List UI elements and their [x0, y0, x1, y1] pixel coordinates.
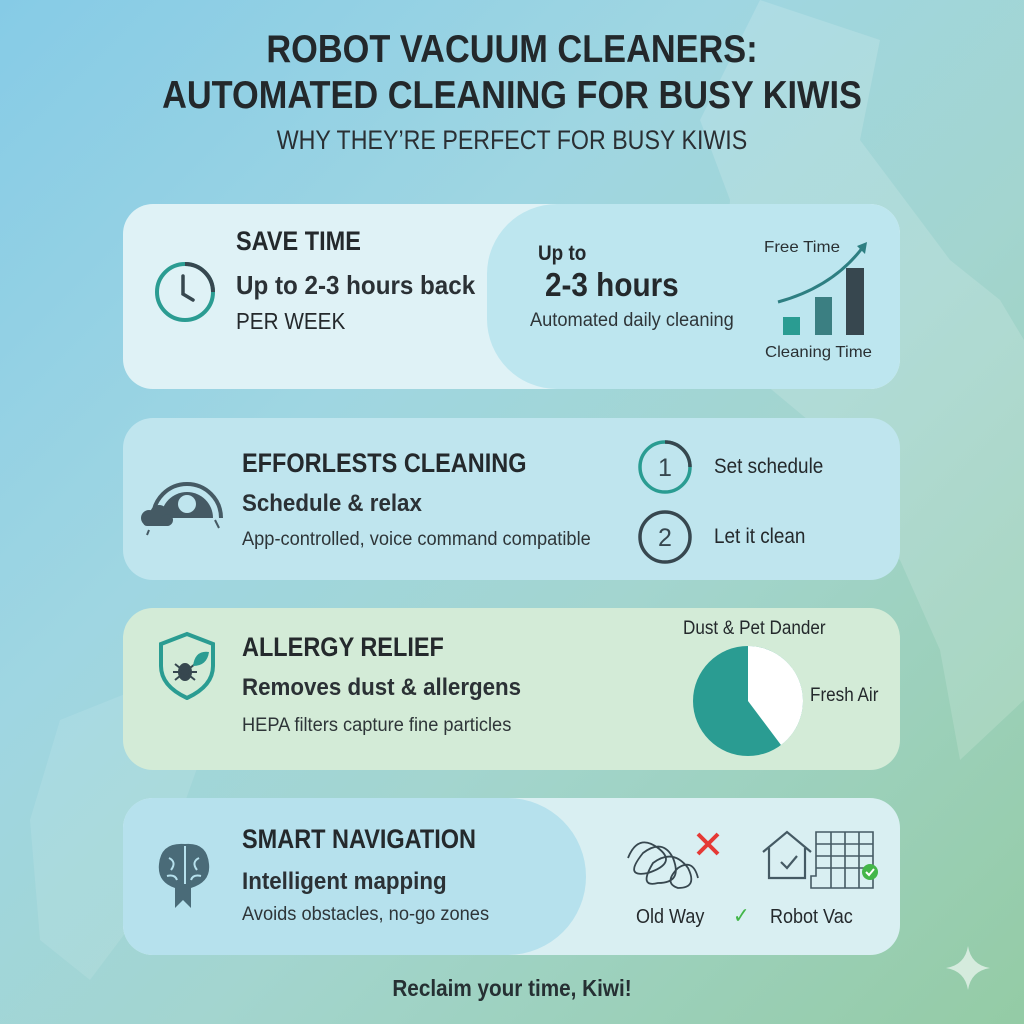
main text: Up to 2-3 hours back: [236, 270, 475, 300]
bar chart: Cleaning Time: [765, 344, 872, 361]
sub text: App-controlled, voice command compatible: [242, 529, 591, 550]
heading: EFFORLESTS CLEANING: [242, 448, 527, 478]
panel: save time: 2-3 hours: [545, 266, 679, 303]
icon: brain: [158, 844, 210, 908]
stat: Up to: [538, 242, 586, 265]
footer: Reclaim your time, Kiwi!: [392, 975, 632, 1001]
legend: Old Way: [636, 906, 704, 928]
subtitle: WHY THEY’RE PERFECT FOR BUSY KIWIS: [277, 125, 747, 155]
panel: smart navigation: Robot Vac: [770, 906, 853, 928]
bar chart: [764, 239, 872, 361]
pie chart: [693, 646, 803, 756]
panel: smart navigation: [123, 798, 900, 955]
title: ROBOT VACUUM CLEANERS:: [266, 28, 758, 71]
heading: SAVE TIME: [236, 226, 361, 256]
panel: effortless cleaning: Set schedule: [714, 455, 823, 478]
title: AUTOMATED CLEANING FOR BUSY KIWIS: [162, 74, 862, 117]
sub text: HEPA filters capture fine particles: [242, 715, 511, 736]
sparkle: [946, 946, 990, 990]
panel: effortless cleaning: [123, 418, 900, 580]
steps: 1: [658, 454, 672, 482]
title: [162, 28, 862, 117]
sub text: PER WEEK: [236, 308, 345, 334]
panel: save time: [123, 204, 900, 389]
main text: Intelligent mapping: [242, 868, 447, 895]
bar chart: Free Time: [764, 239, 840, 256]
main text: Schedule & relax: [242, 490, 422, 517]
sub text: Avoids obstacles, no-go zones: [242, 904, 489, 925]
panel: smart navigation: ✓: [733, 903, 750, 928]
panel: effortless cleaning: Let it clean: [714, 525, 805, 548]
main text: Removes dust & allergens: [242, 674, 521, 701]
right sub-panel: [487, 204, 900, 389]
panel: allergy relief: [123, 608, 900, 770]
steps: [638, 440, 692, 564]
old way icon: [627, 832, 720, 889]
icon: clock: [155, 262, 215, 322]
panel: save time: Automated daily cleaning: [530, 310, 734, 331]
icon: shield: [159, 632, 215, 700]
left sub-panel: [123, 798, 586, 955]
heading: ALLERGY RELIEF: [242, 632, 444, 662]
icon: robot vacuum: [141, 482, 223, 536]
heading: SMART NAVIGATION: [242, 824, 476, 854]
panel: allergy relief: Fresh Air: [810, 685, 878, 706]
steps: 2: [658, 524, 672, 552]
panel: allergy relief: Dust & Pet Dander: [683, 618, 826, 639]
robot vac icon: [762, 830, 878, 889]
